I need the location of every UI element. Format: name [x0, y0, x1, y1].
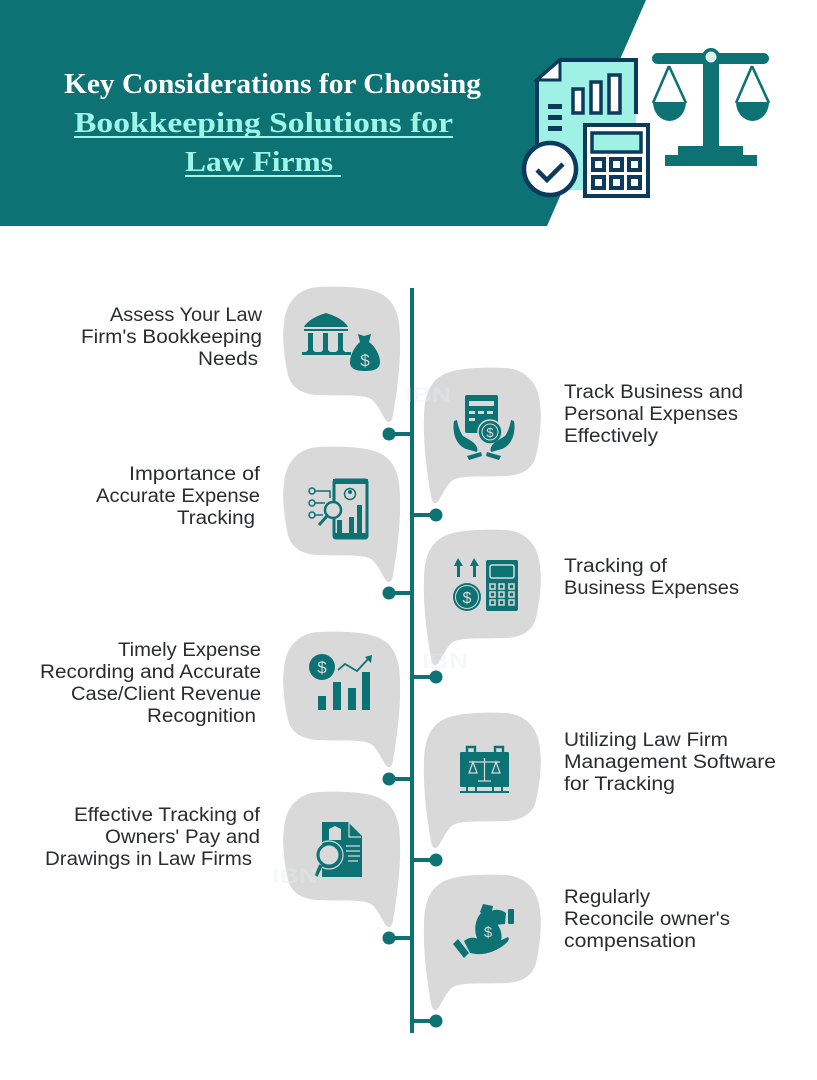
watermarks: IBN [272, 865, 318, 888]
timeline node 5 [389, 777, 411, 781]
title: Key Considerations for Choosing [64, 68, 482, 100]
step 4: tracking of business expenses [413, 530, 739, 684]
speech bubble 5 [283, 632, 400, 767]
icon: scales on a monitor board [460, 747, 509, 792]
label 6: Utilizing Law Firm [564, 730, 728, 751]
icon: calculator in hands: $ [486, 425, 494, 440]
label 8 [564, 887, 730, 952]
label 5: Timely Expense [118, 640, 261, 661]
timeline node 7 [389, 936, 411, 940]
label 2: Personal Expenses [564, 404, 738, 425]
label 1: Assess Your Law [110, 305, 262, 326]
label 4: Business Expenses [564, 578, 739, 599]
icon: phone analytics [309, 479, 368, 538]
label 5 [40, 640, 261, 727]
speech bubble 8 [424, 875, 541, 1010]
label 2: Track Business and [564, 382, 743, 403]
icon: coin and rising bar chart: $ [317, 658, 327, 677]
label 7: Drawings in Law Firms [45, 849, 252, 870]
label 7 [45, 805, 261, 870]
timeline node 6 [413, 858, 436, 862]
label 1 [81, 305, 262, 370]
label 4: Tracking of [564, 556, 668, 577]
step 7: owners' pay and drawings [45, 792, 411, 944]
icon: coin and rising bar chart [309, 654, 372, 710]
icon: hand giving money: $ [484, 924, 493, 941]
label 3: Tracking [177, 508, 255, 529]
icon: bank and money bag [302, 313, 380, 371]
label 2 [564, 382, 743, 447]
icon: bank and money bag: $ [360, 351, 370, 370]
step 5: timely recording and revenue recognition [40, 632, 411, 786]
label 8: Reconcile owner's [564, 909, 730, 930]
timeline node 1 [389, 432, 411, 436]
timeline node 3 [389, 591, 411, 595]
timeline node 2 [413, 513, 436, 517]
label 4 [564, 556, 739, 599]
label 3: Accurate Expense [96, 486, 260, 507]
speech bubble 1 [283, 287, 400, 422]
timeline node 8 [413, 1019, 436, 1023]
label 2: Effectively [564, 426, 659, 447]
step 2: track business and personal expenses [413, 368, 743, 522]
label 3: Importance of [129, 464, 261, 485]
label 7: Owners' Pay and [105, 827, 260, 848]
label 8: Regularly [564, 887, 651, 908]
label 1: Needs [198, 349, 258, 370]
label 6: for Tracking [564, 774, 675, 795]
title: Law Firms [185, 146, 333, 178]
title [64, 68, 482, 178]
icon: document and magnifier [315, 822, 362, 877]
label 6: Management Software [564, 752, 776, 773]
label 8: compensation [564, 931, 696, 952]
label 5: Case/Client Revenue [71, 684, 261, 705]
icon: hand giving money [453, 904, 514, 958]
timeline node 4 [413, 675, 436, 679]
icon: document with bar chart and calculator [524, 60, 648, 196]
step 3: accurate expense tracking [96, 447, 411, 600]
label 3 [96, 464, 261, 529]
speech bubble 3 [283, 447, 400, 582]
speech bubble 4 [424, 530, 541, 665]
watermarks: IBN [405, 384, 451, 407]
icon: calculator in hands [454, 395, 514, 460]
timeline spine [410, 288, 414, 1033]
step 1: assess needs [81, 287, 411, 440]
title: Bookkeeping Solutions for [74, 107, 453, 139]
step 8: reconcile owner's compensation [413, 875, 730, 1028]
icon: coin, arrows and calculator [453, 558, 518, 611]
label 5: Recording and Accurate [40, 662, 261, 683]
label 5: Recognition [147, 706, 256, 727]
speech bubble 2 [424, 368, 541, 503]
speech bubble 6 [424, 713, 541, 848]
label 7: Effective Tracking of [74, 805, 261, 826]
speech bubble 7 [283, 792, 400, 927]
label 6 [564, 730, 776, 795]
header banner [0, 0, 646, 226]
label 1: Firm's Bookkeeping [81, 327, 262, 348]
step 6: law firm management software [413, 713, 776, 866]
watermarks [272, 384, 468, 888]
icon: scales of justice [652, 48, 769, 166]
icon: coin, arrows and calculator: $ [463, 590, 472, 607]
watermarks: IBN [422, 650, 468, 673]
